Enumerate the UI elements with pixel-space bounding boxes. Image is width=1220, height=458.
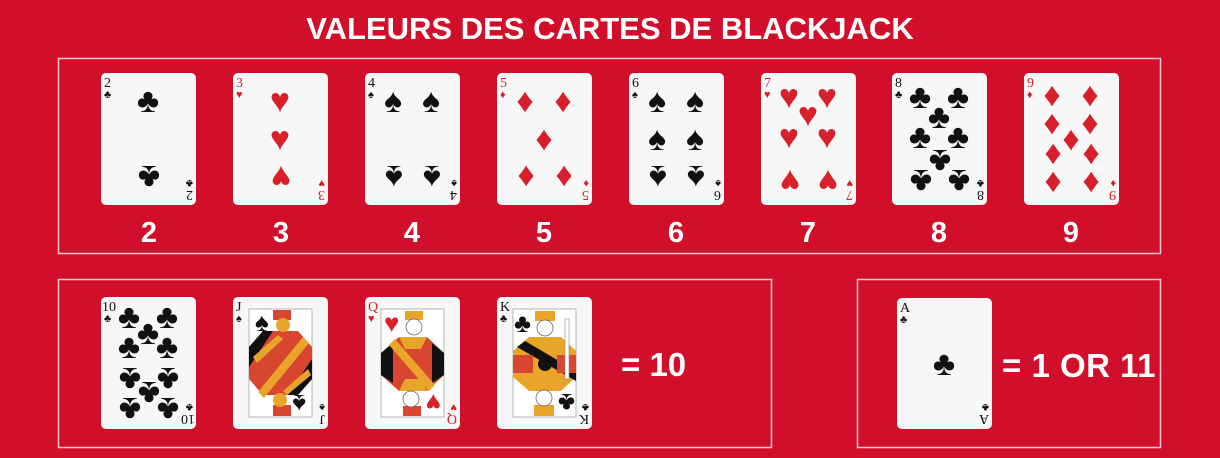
card: king of clubs: K <box>500 300 510 315</box>
card: jack of spades: ♠ <box>319 401 325 413</box>
card: 10 of clubs: 10 <box>181 411 195 426</box>
card: 6 of spades: ♠ <box>648 82 666 120</box>
panel: face cards <box>58 280 772 448</box>
card: ace of clubs: ♣ <box>982 401 989 413</box>
card: 7 of hearts: ♥ <box>779 118 799 156</box>
card: 6 of spades: 6 <box>632 76 639 91</box>
card: 3 of hearts: ♥ <box>270 120 290 158</box>
panel: ace <box>858 280 1160 448</box>
card: 9 of diamonds: ♦ <box>1081 76 1099 114</box>
card: 9 of diamonds: ♦ <box>1062 120 1080 158</box>
card: 5 of diamonds: ♦ <box>516 82 534 120</box>
card: jack of spades: J <box>236 300 242 315</box>
card: ace of clubs: A <box>900 301 911 316</box>
value labels: 2 <box>141 217 157 249</box>
card: 6 of spades: ♠ <box>648 120 666 158</box>
card: 8 of clubs: ♣ <box>928 98 950 136</box>
card: 7 of hearts: ♥ <box>779 78 799 116</box>
value labels: 6 <box>668 217 684 249</box>
card: 10 of clubs: ♣ <box>138 374 160 412</box>
card: 9 of diamonds: ♦ <box>1044 136 1062 174</box>
card: 10 of clubs: ♣ <box>137 314 159 352</box>
card: 2 of clubs: ♣ <box>138 158 160 196</box>
card: king of clubs: ♣ <box>514 308 531 338</box>
text: equals 1 or 11: = 1 OR 11 <box>1002 347 1156 384</box>
card: 9 of diamonds: ♦ <box>1043 76 1061 114</box>
card: 5 of diamonds: ♦ <box>517 158 535 196</box>
card: 9 of diamonds: ♦ <box>1110 177 1116 189</box>
card: 4 of spades: ♠ <box>385 158 403 196</box>
card: 5 of diamonds: 5 <box>500 76 507 91</box>
card: 7 of hearts <box>761 73 856 205</box>
card: 7 of hearts: 7 <box>764 76 771 91</box>
card: 10 of clubs: ♣ <box>157 390 179 428</box>
card: 10 of clubs: 10 <box>102 300 116 315</box>
card: 8 of clubs: 8 <box>977 187 984 202</box>
card: 8 of clubs: ♣ <box>895 89 902 101</box>
card: 9 of diamonds <box>1024 73 1119 205</box>
card: queen of hearts: ♥ <box>368 313 375 325</box>
card: 4 of spades: 4 <box>368 76 375 91</box>
card: 5 of diamonds: ♦ <box>535 120 553 158</box>
card: 10 of clubs <box>101 297 196 429</box>
card: 8 of clubs: ♣ <box>947 78 969 116</box>
card: queen of hearts: ♥ <box>450 401 457 413</box>
card: jack of spades: J <box>319 411 325 426</box>
card: 2 of clubs: ♣ <box>137 82 159 120</box>
card: 10 of clubs: ♣ <box>104 313 111 325</box>
card: 3 of hearts <box>233 73 328 205</box>
card: 9 of diamonds: ♦ <box>1044 164 1062 202</box>
card: 3 of hearts: ♥ <box>270 82 290 120</box>
card: 5 of diamonds <box>497 73 592 205</box>
card: 5 of diamonds: ♦ <box>554 82 572 120</box>
card: 9 of diamonds: ♦ <box>1082 136 1100 174</box>
card: 2 of clubs: ♣ <box>104 89 111 101</box>
card: 5 of diamonds: ♦ <box>555 158 573 196</box>
card: 6 of spades: ♠ <box>687 158 705 196</box>
card: 3 of hearts: 3 <box>236 76 243 91</box>
card: 5 of diamonds: ♦ <box>500 89 506 101</box>
card: 4 of spades: ♠ <box>451 177 457 189</box>
panel: number cards <box>58 58 1160 254</box>
card: 8 of clubs: ♣ <box>909 118 931 156</box>
card: jack of spades: ♠ <box>292 389 306 419</box>
card: 7 of hearts: ♥ <box>780 162 800 200</box>
card: 10 of clubs: ♣ <box>118 328 140 366</box>
card: 6 of spades: ♠ <box>649 158 667 196</box>
card: 7 of hearts: ♥ <box>817 78 837 116</box>
card: 9 of diamonds: ♦ <box>1027 89 1033 101</box>
card: 6 of spades: 6 <box>714 187 721 202</box>
card: 8 of clubs: 8 <box>895 76 902 91</box>
card: 8 of clubs: ♣ <box>977 177 984 189</box>
card: 5 of diamonds: 5 <box>582 187 589 202</box>
value labels <box>141 217 1079 249</box>
card: jack of spades <box>233 297 328 429</box>
value labels: 3 <box>273 217 289 249</box>
card: 10 of clubs: ♣ <box>186 401 193 413</box>
card: 3 of hearts: ♥ <box>271 158 291 196</box>
card: 4 of spades: ♠ <box>423 158 441 196</box>
card: 10 of clubs: ♣ <box>118 298 140 336</box>
card: ace of clubs <box>897 298 992 429</box>
value labels: 4 <box>404 217 420 249</box>
card: ace of clubs: ♣ <box>900 314 907 326</box>
card: 3 of hearts: 3 <box>318 187 325 202</box>
title: VALEURS DES CARTES DE BLACKJACK <box>306 11 914 46</box>
card: 10 of clubs: ♣ <box>156 328 178 366</box>
card: 6 of spades: ♠ <box>686 82 704 120</box>
value labels: 5 <box>536 217 552 249</box>
card: 10 of clubs: ♣ <box>156 298 178 336</box>
card: 3 of hearts: ♥ <box>318 177 325 189</box>
card: king of clubs: ♣ <box>558 388 575 418</box>
card: 4 of spades <box>365 73 460 205</box>
card: 7 of hearts: ♥ <box>818 162 838 200</box>
card: jack of spades: ♠ <box>236 313 242 325</box>
value labels: 8 <box>931 217 947 249</box>
card: queen of hearts: Q <box>447 411 457 426</box>
card: 10 of clubs: ♣ <box>157 360 179 398</box>
card: king of clubs: K <box>579 411 589 426</box>
card: queen of hearts <box>365 297 460 429</box>
card: 6 of spades: ♠ <box>632 89 638 101</box>
card: 9 of diamonds: 9 <box>1109 187 1116 202</box>
card: queen of hearts: ♥ <box>384 308 399 338</box>
card: 9 of diamonds: 9 <box>1027 76 1034 91</box>
card: 9 of diamonds: ♦ <box>1081 104 1099 142</box>
card: 3 of hearts: ♥ <box>236 89 243 101</box>
card: 4 of spades: 4 <box>450 187 457 202</box>
card: 2 of clubs <box>101 73 196 205</box>
card: 8 of clubs <box>892 73 987 205</box>
card: 6 of spades: ♠ <box>686 120 704 158</box>
card: 8 of clubs: ♣ <box>910 162 932 200</box>
card: 2 of clubs: ♣ <box>186 177 193 189</box>
card: king of clubs <box>497 297 592 429</box>
card: ace of clubs: ♣ <box>933 345 955 383</box>
card: 9 of diamonds: ♦ <box>1082 164 1100 202</box>
card: 6 of spades <box>629 73 724 205</box>
card: 5 of diamonds: ♦ <box>583 177 589 189</box>
card: 7 of hearts: 7 <box>846 187 853 202</box>
card: king of clubs: ♣ <box>500 313 507 325</box>
card: queen of hearts: Q <box>368 300 378 315</box>
card: king of clubs: ♣ <box>582 401 589 413</box>
card: 6 of spades: ♠ <box>715 177 721 189</box>
card: 4 of spades: ♠ <box>384 82 402 120</box>
card: 8 of clubs: ♣ <box>909 78 931 116</box>
text: equals 10: = 10 <box>621 346 686 383</box>
card: ace of clubs: A <box>978 411 989 426</box>
value labels: 7 <box>800 217 816 249</box>
card: 7 of hearts: ♥ <box>764 89 771 101</box>
card: 8 of clubs: ♣ <box>929 142 951 180</box>
value labels: 9 <box>1063 217 1079 249</box>
card: 9 of diamonds: ♦ <box>1043 104 1061 142</box>
card: 2 of clubs: 2 <box>104 76 111 91</box>
card: 4 of spades: ♠ <box>422 82 440 120</box>
card: 7 of hearts: ♥ <box>846 177 853 189</box>
card: 7 of hearts: ♥ <box>817 118 837 156</box>
card: 10 of clubs: ♣ <box>119 360 141 398</box>
card: 10 of clubs: ♣ <box>119 390 141 428</box>
card: 2 of clubs: 2 <box>186 187 193 202</box>
card: queen of hearts: ♥ <box>426 388 441 418</box>
card: 7 of hearts: ♥ <box>798 96 818 134</box>
card: jack of spades: ♠ <box>255 307 269 337</box>
card: 8 of clubs: ♣ <box>948 162 970 200</box>
card: 8 of clubs: ♣ <box>947 118 969 156</box>
card: 4 of spades: ♠ <box>368 89 374 101</box>
